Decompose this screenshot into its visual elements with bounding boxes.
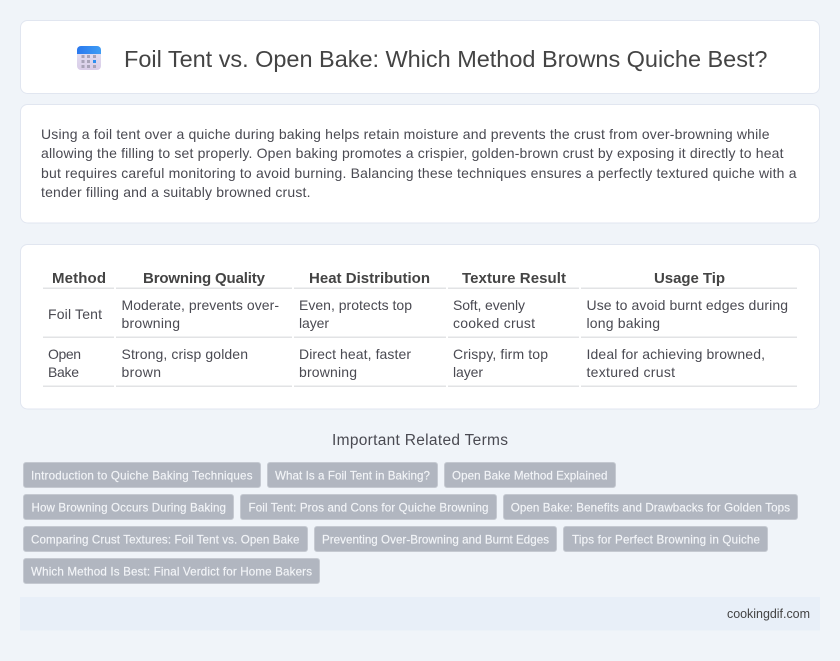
- tag: Which Method Is Best: Final Verdict for Home Bakers: [31, 566, 312, 578]
- table row: open bake: [48, 346, 765, 380]
- table rules: [43, 288, 797, 387]
- table row: open bake: Direct heat, faster: [299, 346, 411, 362]
- table row: foil tent: Foil Tent: [48, 306, 102, 322]
- tag: Open Bake Method Explained: [452, 470, 608, 482]
- intro paragraph: Using a foil tent over a quiche during baking helps retain moisture and prevents the crust from over-browning while: [41, 126, 770, 142]
- tag: What Is a Foil Tent in Baking?: [275, 470, 431, 482]
- table row: open bake: Strong, crisp golden: [122, 346, 248, 362]
- intro paragraph: [41, 126, 797, 200]
- tag: Introduction to Quiche Baking Techniques: [31, 470, 253, 482]
- intro paragraph: allowing the filling to set properly. Open baking promotes a crispier, golden-brown crust by exposing it directly to heat: [41, 145, 784, 161]
- table row: open bake: Ideal for achieving browned,: [586, 346, 765, 362]
- table row: foil tent: cooked crust: [453, 315, 535, 331]
- table header row: Heat Distribution: [309, 270, 430, 287]
- icon: calendar: [77, 46, 101, 70]
- related term tags: [24, 462, 798, 584]
- tag: [240, 494, 496, 520]
- table header row: Texture Result: [462, 270, 566, 287]
- tag: [24, 462, 260, 488]
- table row: open bake: browning: [299, 364, 357, 380]
- table header row: Usage Tip: [654, 270, 725, 287]
- table row: foil tent: Use to avoid burnt edges during: [586, 297, 788, 313]
- tag: How Browning Occurs During Baking: [32, 502, 226, 514]
- table row: foil tent: [48, 297, 788, 331]
- tag: [24, 526, 308, 552]
- tag: Tips for Perfect Browning in Quiche: [572, 534, 760, 546]
- heading: related terms: Important Related Terms: [332, 432, 508, 449]
- table header row: [52, 270, 725, 287]
- tag: Foil Tent: Pros and Cons for Quiche Browning: [248, 502, 488, 514]
- table row: open bake: Crispy, firm top: [453, 346, 548, 362]
- tag: [268, 462, 438, 488]
- table row: open bake: Open: [48, 346, 81, 362]
- panel: header: [20, 20, 820, 94]
- table row: foil tent: Even, protects top: [299, 297, 412, 313]
- table row: open bake: textured crust: [586, 364, 675, 380]
- tag: [444, 462, 616, 488]
- table row: open bake: brown: [122, 364, 161, 380]
- title: Foil Tent vs. Open Bake: Which Method Browns Quiche Best?: [124, 46, 768, 72]
- tag: [504, 494, 798, 520]
- table row: open bake: Bake: [48, 364, 79, 380]
- panel: introduction: [20, 104, 820, 223]
- panel: comparison table: [20, 244, 820, 409]
- tag: Open Bake: Benefits and Drawbacks for Golden Tops: [511, 502, 790, 514]
- table row: foil tent: Soft, evenly: [453, 297, 525, 313]
- tag: [24, 558, 320, 584]
- footer domain: cookingdif.com: [727, 607, 810, 621]
- tag: [564, 526, 768, 552]
- footer: [20, 597, 820, 630]
- tag: [314, 526, 556, 552]
- tag: [24, 494, 234, 520]
- tag: Comparing Crust Textures: Foil Tent vs. Open Bake: [31, 534, 300, 546]
- tag: Preventing Over-Browning and Burnt Edges: [322, 534, 549, 546]
- intro paragraph: tender filling and a suitably browned crust.: [41, 184, 310, 200]
- table row: foil tent: Moderate, prevents over-: [122, 297, 279, 313]
- table header row: Browning Quality: [143, 270, 266, 287]
- table row: foil tent: long baking: [586, 315, 660, 331]
- table row: open bake: layer: [453, 364, 483, 380]
- table row: foil tent: browning: [122, 315, 180, 331]
- table header row: Method: [52, 270, 106, 287]
- intro paragraph: but requires careful monitoring to avoid burning. Balancing these techniques ensures a perfectly textured quiche with a: [41, 165, 797, 181]
- table row: foil tent: layer: [299, 315, 329, 331]
